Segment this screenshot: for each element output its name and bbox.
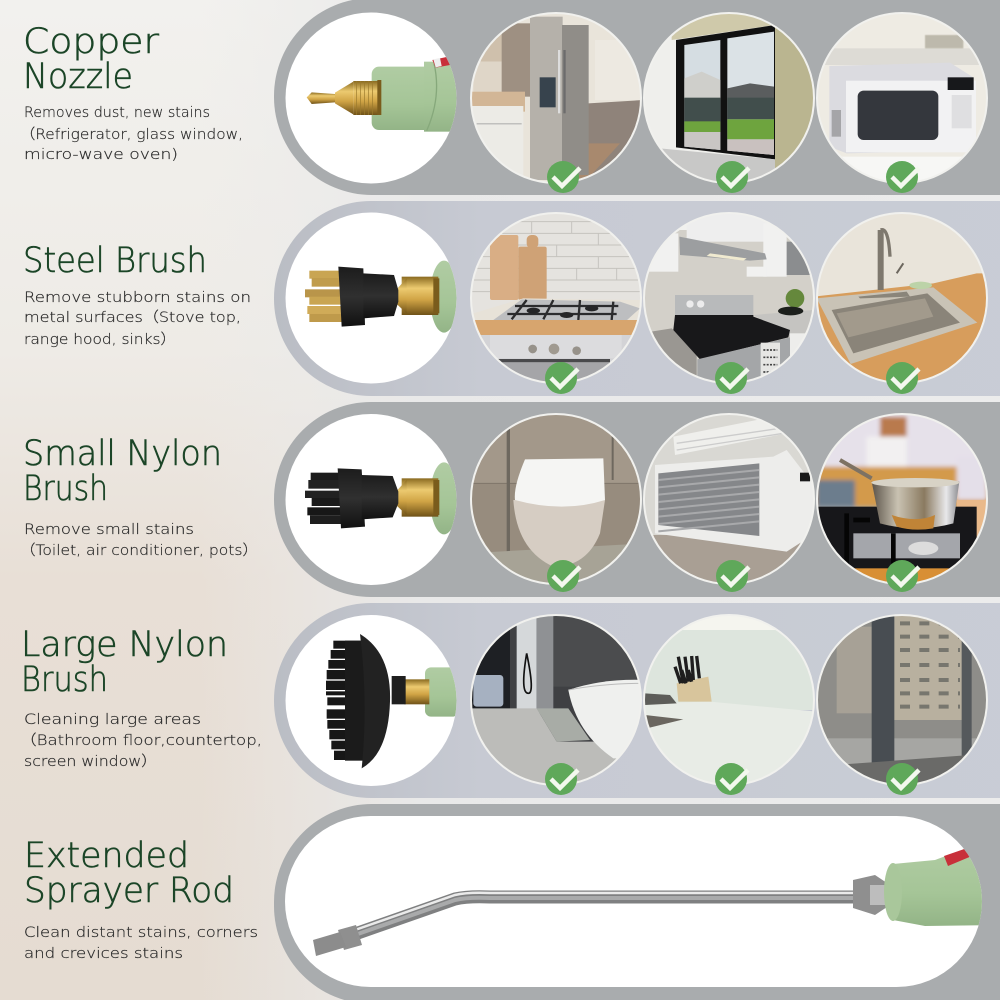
panel: copper nozzle (20, 0, 1000, 195)
check mark 2 (715, 763, 748, 795)
photo: glass window (640, 10, 820, 187)
rod (313, 893, 860, 956)
check mark 2 (716, 161, 749, 193)
photo: bathroom floor (467, 610, 647, 787)
heading: Copper Nozzle (23, 22, 160, 97)
check mark 3 (886, 362, 919, 394)
panel: extended sprayer rod (24, 804, 1000, 1000)
photo: toilet (467, 410, 647, 587)
description: large nylon brush: screen window） (24, 753, 157, 770)
panel band (274, 201, 1000, 396)
description: extended sprayer rod: and crevices stains (24, 946, 183, 962)
check mark 3 (886, 560, 919, 592)
check mark 1 (547, 560, 580, 592)
tool capsule: extended sprayer rod (285, 816, 1000, 987)
photo: pot on burner (813, 410, 993, 587)
description: large nylon brush: Cleaning large areas (24, 712, 201, 728)
heading: Extended Sprayer Rod (24, 836, 234, 911)
panel band (274, 804, 1000, 1000)
heading: Large Nylon Brush (21, 625, 228, 700)
check mark 1 (545, 362, 578, 394)
description: copper nozzle: Removes dust, new stains (24, 105, 210, 121)
description: small nylon brush (20, 522, 258, 559)
panel band (274, 402, 1000, 597)
description: extended sprayer rod (24, 925, 258, 962)
heading: Large Nylon Brush: Large Nylon (21, 625, 228, 665)
panel: steel brush (23, 201, 1000, 396)
heading: Copper Nozzle: Nozzle (23, 57, 133, 97)
tool circle: small nylon brush (286, 414, 458, 585)
photo: stove top (467, 210, 647, 388)
check mark 2 (716, 560, 749, 592)
panel band (274, 0, 1000, 195)
heading: Copper Nozzle: Copper (23, 22, 160, 62)
photo: range hood (640, 210, 820, 387)
description: small nylon brush: （Toilet, air conditioner, pots） (20, 542, 258, 559)
description: steel brush: metal surfaces（Stove top, (24, 309, 241, 326)
heading: Extended Sprayer Rod: Extended (24, 836, 189, 876)
description: steel brush: Remove stubborn stains on (24, 290, 251, 306)
description: large nylon brush (20, 712, 262, 770)
panel: small nylon brush (20, 402, 1000, 597)
description: large nylon brush: （Bathroom floor,countertop, (20, 732, 262, 749)
description: copper nozzle: （Refrigerator, glass window, (20, 126, 243, 143)
heading: Steel Brush: Steel Brush (23, 241, 207, 281)
heading: Extended Sprayer Rod: Sprayer Rod (24, 871, 234, 911)
tool circle: copper nozzle (286, 12, 461, 184)
panel: large nylon brush (20, 603, 1000, 798)
description: steel brush (24, 290, 251, 348)
description: copper nozzle: micro-wave oven) (24, 147, 178, 163)
photo: sink (813, 210, 993, 387)
description: extended sprayer rod: Clean distant stains, corners (24, 925, 258, 941)
sprayer body (853, 849, 982, 926)
check mark 1 (547, 161, 580, 193)
photo: screen window (813, 610, 993, 787)
description: small nylon brush: Remove small stains (24, 522, 194, 538)
check mark 1 (545, 763, 578, 795)
description: steel brush: range hood, sinks） (24, 331, 176, 348)
heading: Small Nylon Brush (23, 434, 222, 509)
check mark 3 (886, 161, 919, 193)
heading: Large Nylon Brush: Brush (21, 660, 108, 700)
check mark 2 (715, 362, 748, 394)
panel band (274, 603, 1000, 798)
photo: refrigerator (467, 10, 647, 187)
tool circle: large nylon brush (286, 615, 458, 786)
heading: Small Nylon Brush: Small Nylon (23, 434, 222, 474)
description: copper nozzle (20, 105, 243, 163)
photo: countertop (640, 610, 820, 787)
photo: air conditioner (640, 410, 820, 587)
tool circle: steel brush (286, 212, 458, 384)
heading: Small Nylon Brush: Brush (23, 469, 108, 509)
photo: microwave oven (813, 10, 993, 187)
check mark 3 (886, 763, 919, 795)
